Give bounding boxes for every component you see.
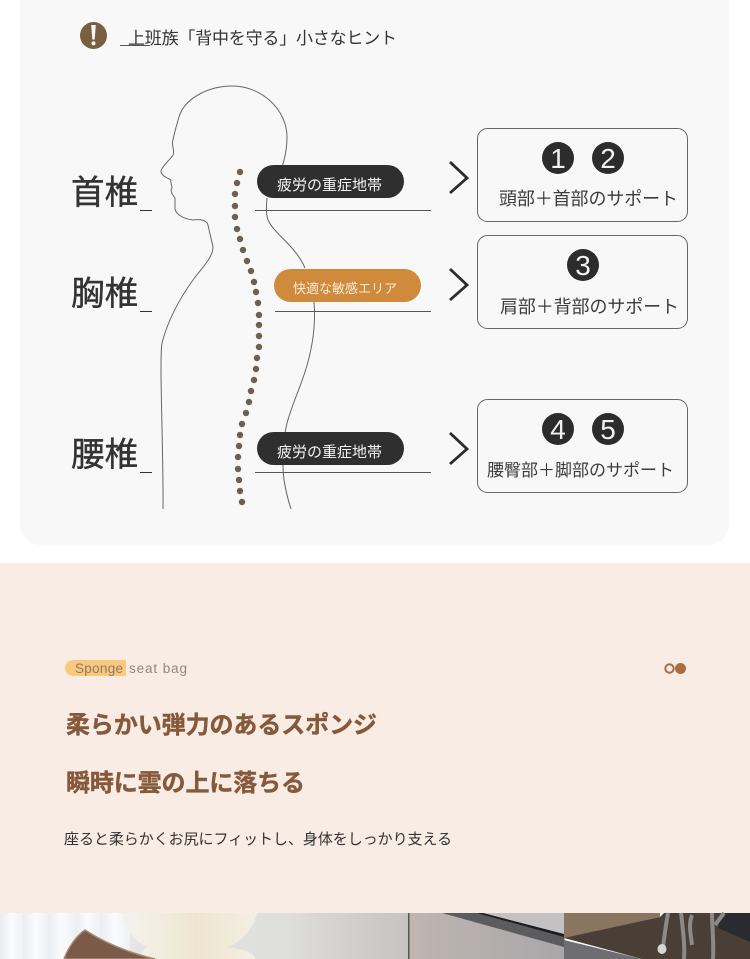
title underline mark [120, 44, 150, 46]
card: head and neck support [478, 128, 688, 222]
icon: exclamation mark [80, 22, 107, 49]
panel: spine hints [20, 0, 729, 545]
label: cervical: 首椎 [71, 175, 138, 212]
card: waist and leg support: 5 [600, 414, 616, 445]
spine dots [232, 169, 262, 505]
arrow: upper [450, 162, 467, 193]
card: shoulder and back support: 3 [575, 250, 591, 281]
arrow: lower [450, 433, 467, 464]
horse legs [663, 913, 724, 959]
tag: sponge seat bag [65, 660, 187, 676]
upper door [478, 913, 564, 935]
card: shoulder and back support [478, 236, 688, 328]
arrow: middle [450, 269, 467, 300]
curtain stripes [0, 913, 130, 959]
photo: sofa and cabinet interior [0, 913, 750, 959]
icon: two dots [665, 663, 686, 674]
label: thoracic: 胸椎 [71, 276, 138, 313]
tag: sponge seat bag: seat bag [129, 661, 187, 676]
shelf back [564, 913, 660, 938]
lower side [564, 940, 642, 959]
card: waist and leg support [478, 400, 688, 492]
body text: 座ると柔らかくお尻にフィットし、身体をしっかり支える [64, 831, 452, 848]
card: head and neck support: 頭部＋首部のサポート [499, 189, 678, 209]
dark wall corner [718, 913, 750, 942]
card: waist and leg support: 腰臀部＋脚部のサポート [487, 461, 674, 480]
body outline [161, 86, 315, 509]
card: head and neck support: 1 [550, 143, 566, 174]
card: head and neck support: 2 [600, 143, 616, 174]
callout: comfort zone [274, 269, 431, 312]
card: shoulder and back support: 肩部＋背部のサポート [500, 297, 679, 317]
heading: line two: 瞬時に雲の上に落ちる [66, 770, 305, 797]
label: lumbar: 腰椎 [71, 437, 138, 474]
lamp [122, 913, 257, 959]
shelf base [564, 913, 750, 959]
callout: fatigue zone lower [255, 432, 431, 472]
callout: fatigue zone upper [255, 165, 431, 210]
dark strip [442, 913, 564, 947]
pillow [64, 930, 155, 959]
cabinet door [409, 913, 565, 959]
horse hoof [658, 944, 666, 954]
heading: panel title: 上班族「背中を守る」小さなヒント [128, 29, 397, 48]
heading: line one: 柔らかい弾力のあるスポンジ [66, 712, 377, 739]
callout: fatigue zone lower: 疲労の重症地帯 [277, 444, 382, 461]
callout: comfort zone: 快適な敏感エリア [293, 281, 397, 296]
card: waist and leg support: 4 [550, 414, 566, 445]
tag: sponge seat bag: Sponge [75, 661, 123, 676]
callout: fatigue zone upper: 疲労の重症地帯 [277, 177, 382, 194]
panel: sponge section [0, 563, 750, 913]
